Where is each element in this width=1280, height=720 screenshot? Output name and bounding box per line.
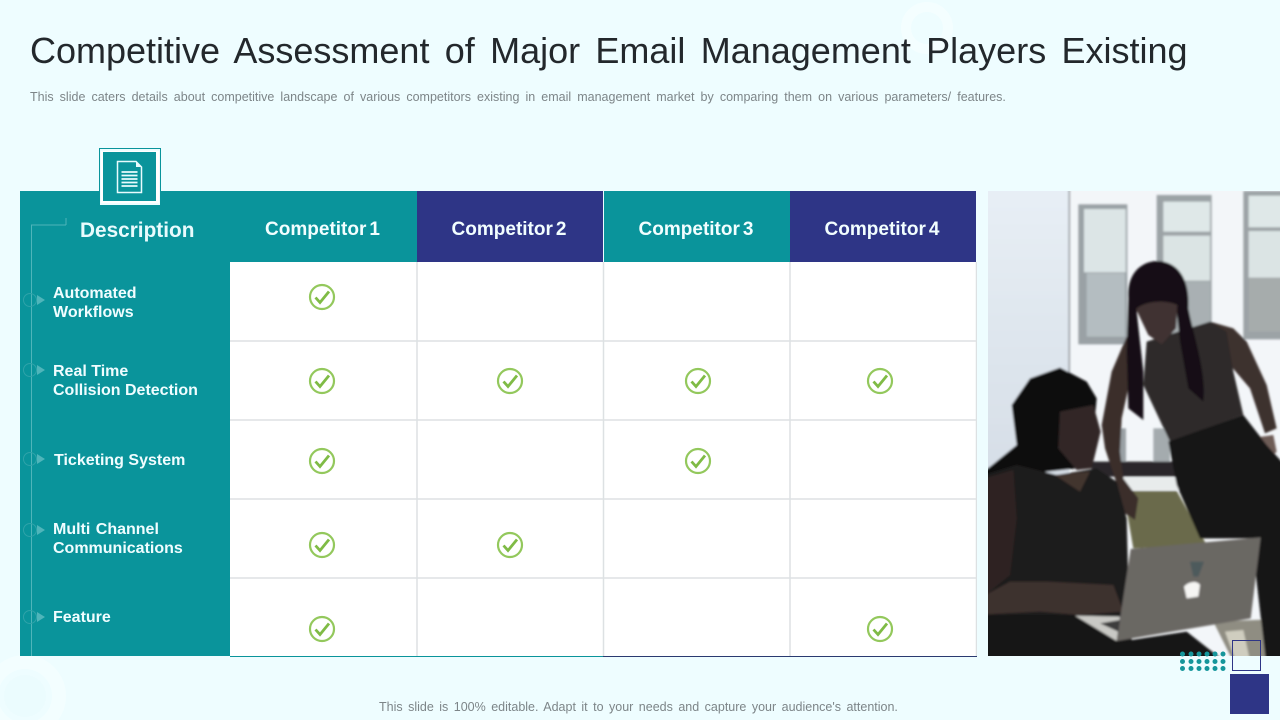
row label: ticketing system: Ticketing System <box>54 452 185 469</box>
decoration: navy solid square <box>1230 674 1269 714</box>
column header: competitor 1: Competitor1 <box>265 219 380 240</box>
row label: multi channel communications: Multi Channel <box>53 521 159 538</box>
comparison table <box>230 262 977 657</box>
row label: real time collision detection: Real Time <box>53 363 128 380</box>
decoration: teal dots <box>1180 652 1226 671</box>
panel: description column <box>20 191 230 656</box>
sitting woman <box>973 368 1097 482</box>
row label: automated workflows: Automated <box>53 285 137 302</box>
column header: competitor 2: Competitor2 <box>452 219 566 240</box>
column header: competitor 2 <box>417 191 603 262</box>
icon: document <box>99 148 161 205</box>
table body grid <box>230 262 977 657</box>
laptop <box>1117 537 1261 641</box>
title: Competitive Assessment of Major Email Management Players Existing <box>30 30 1188 71</box>
column header: competitor 3 <box>604 191 790 262</box>
decoration: navy outline square <box>1232 640 1261 671</box>
footer note: This slide is 100% editable. Adapt it to your needs and capture your audience's attention. <box>379 700 898 714</box>
row label: real time collision detection: Collision Detection <box>53 382 198 399</box>
row label: multi channel communications: Communications <box>53 540 183 557</box>
column header: competitor 4 <box>790 191 976 262</box>
column header: competitor 4: Competitor4 <box>825 219 939 240</box>
row label: automated workflows <box>53 285 137 321</box>
subtitle: This slide caters details about competitive landscape of various competitors existing in email management market by comparing them on various parameters/ features. <box>30 90 1006 104</box>
row label: real time collision detection <box>53 363 198 399</box>
photo: two women working at a laptop <box>988 191 1280 656</box>
standing woman dress <box>1143 322 1243 442</box>
row label: automated workflows: Workflows <box>53 304 134 321</box>
standing woman head and hair <box>1127 261 1204 420</box>
timeline connector <box>23 218 66 656</box>
windows <box>1078 204 1127 344</box>
heading: description: Description <box>80 219 194 242</box>
window ledge and sofa <box>1092 462 1280 477</box>
standing woman arms <box>1102 337 1138 520</box>
column header: competitor 1 <box>230 191 417 262</box>
row label: feature: Feature <box>53 609 111 626</box>
column header: competitor 3: Competitor3 <box>639 219 753 240</box>
row label: multi channel communications <box>53 521 183 557</box>
